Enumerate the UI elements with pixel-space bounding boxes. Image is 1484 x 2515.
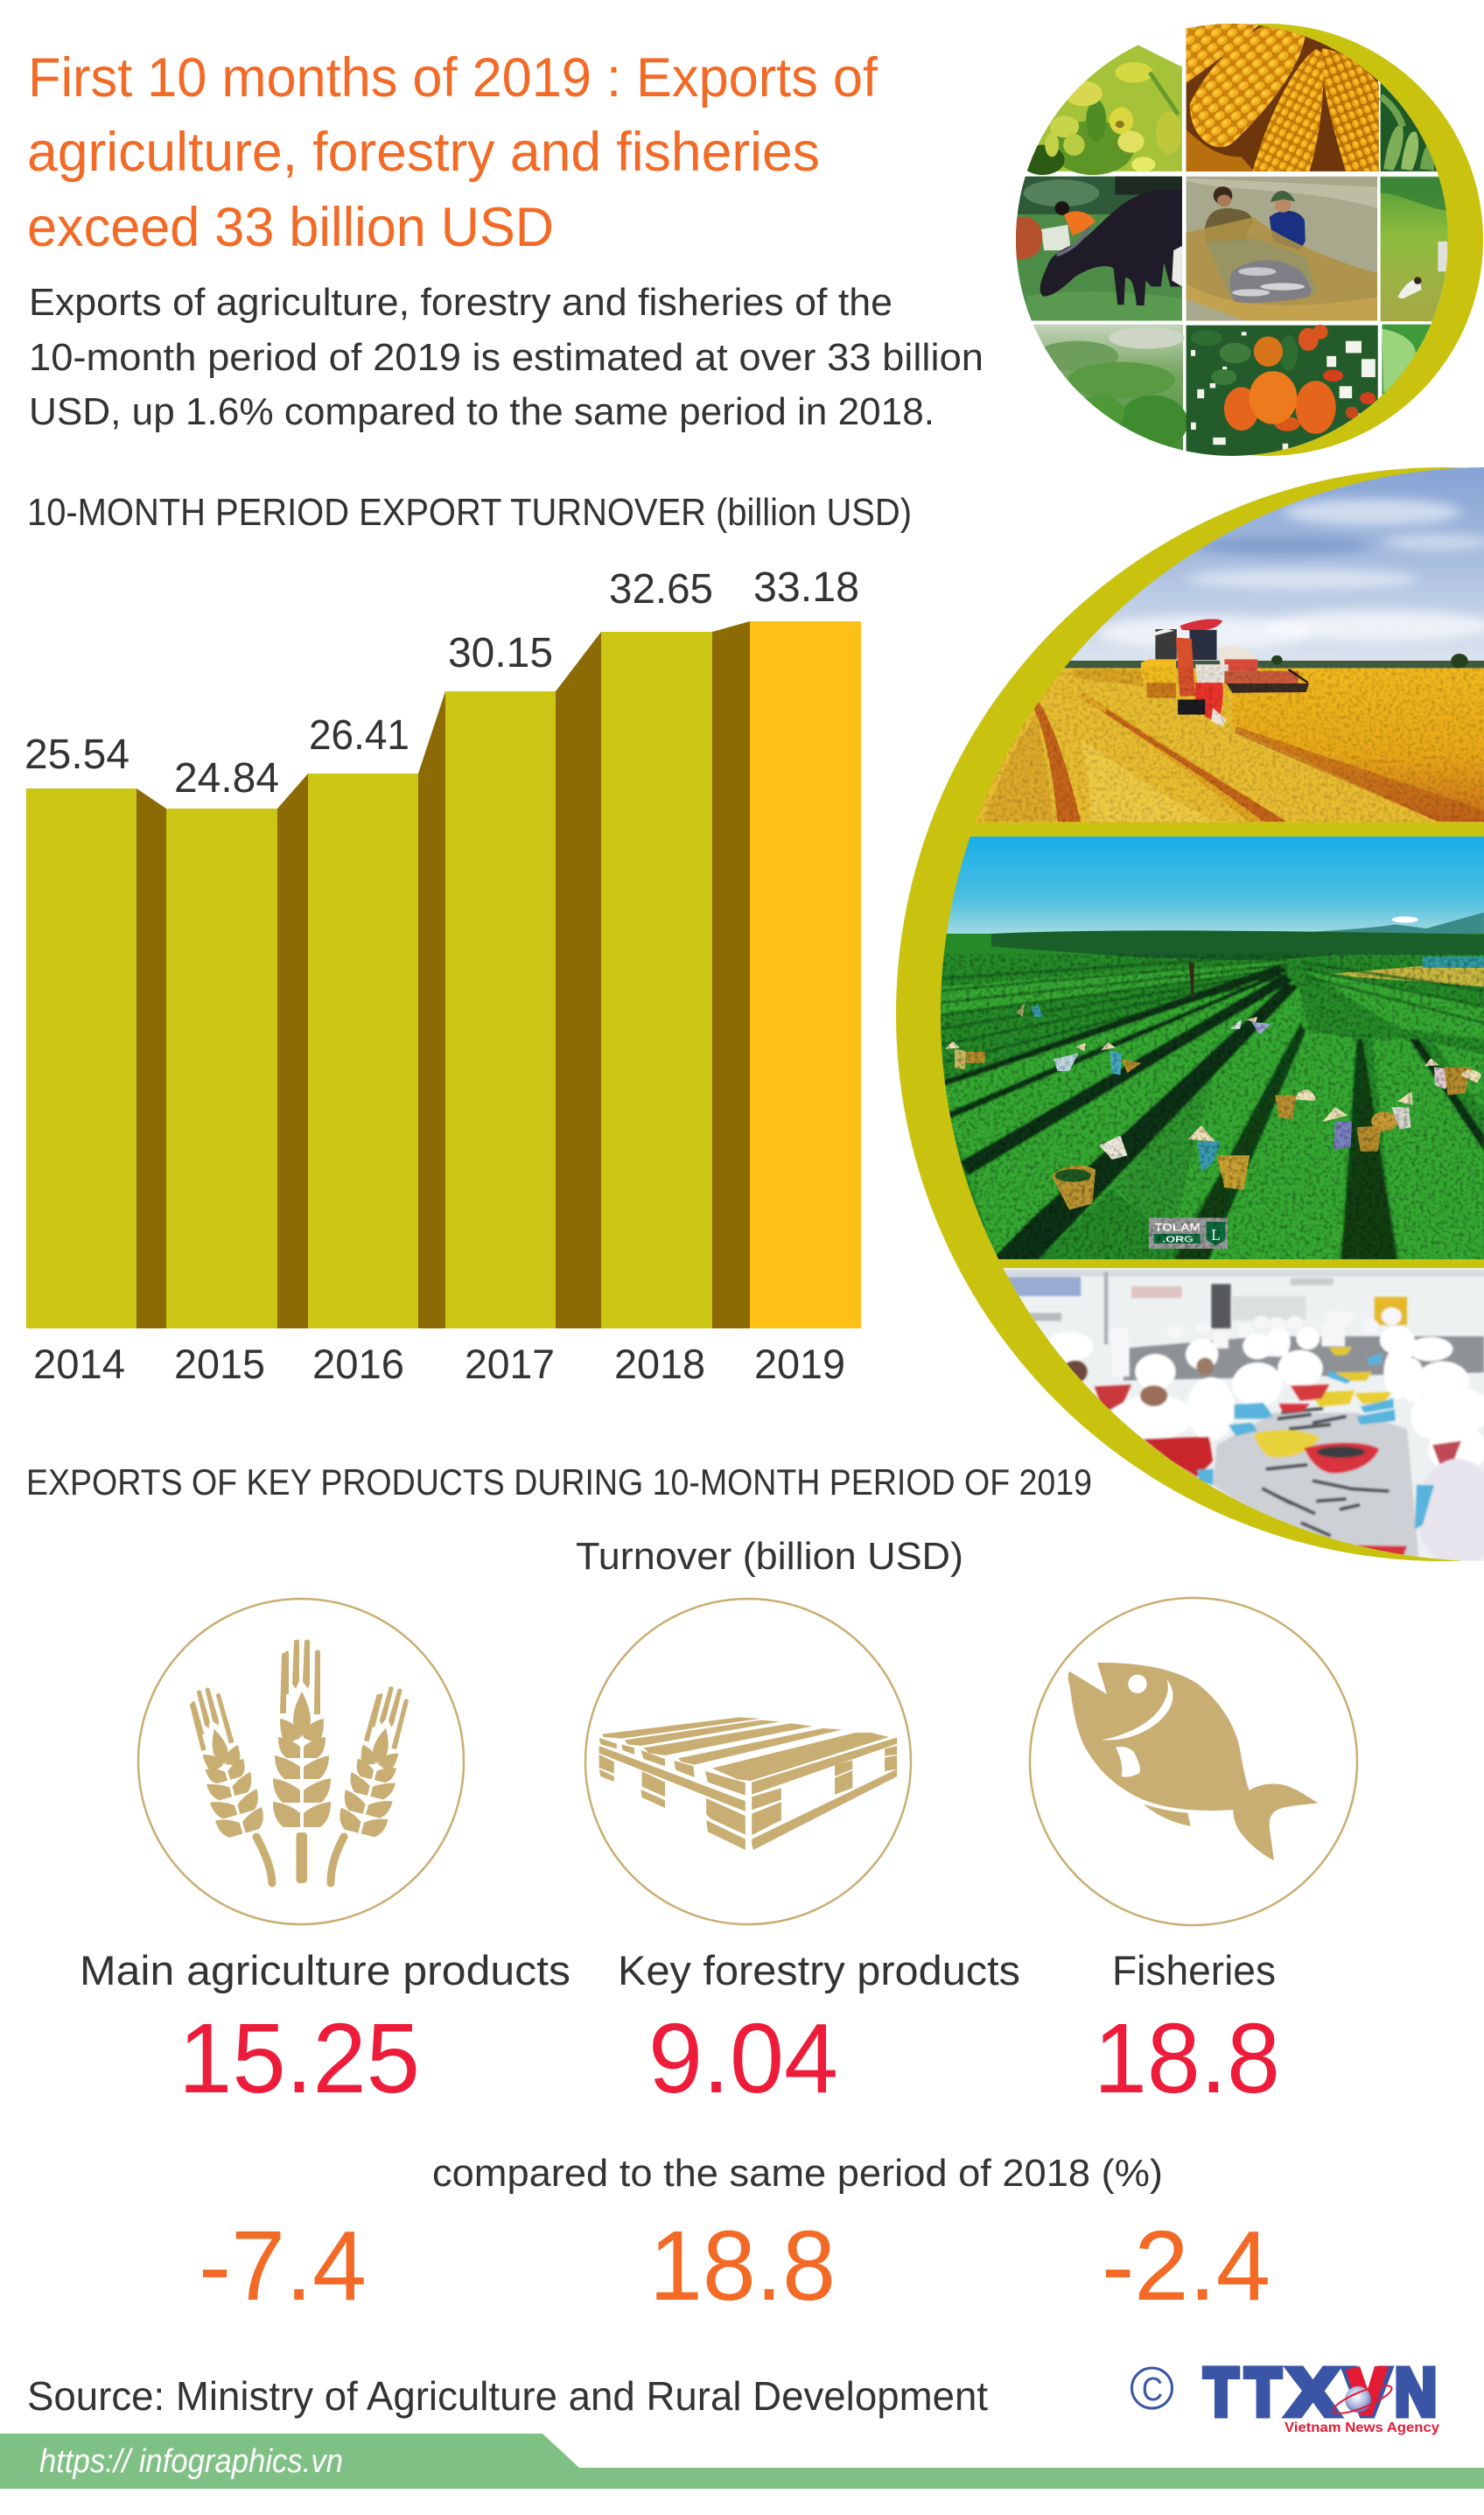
- year labels: 2015: [174, 1341, 265, 1387]
- badge: tolam.org: L: [1211, 1227, 1221, 1243]
- product label: main agriculture products: Main agriculture products: [80, 1947, 570, 1993]
- title: First 10 months of 2019 : Exports of: [28, 47, 878, 109]
- title: exceed 33 billion USD: [27, 197, 554, 258]
- bar values: 24.84: [174, 755, 279, 802]
- bar 2018: [601, 632, 712, 1328]
- cell: green vegetables: [1379, 82, 1437, 172]
- workers: [1045, 1327, 1484, 1473]
- logo: TTXVN Vietnam News Agency: T: [1245, 2355, 1281, 2430]
- cell: oranges on the tree: [1186, 325, 1378, 458]
- logo: TTXVN Vietnam News Agency: T: [1204, 2355, 1238, 2430]
- turnover values: 18.8: [1094, 2003, 1280, 2113]
- turnover subheading: Turnover (billion USD): [576, 1535, 963, 1578]
- cell: buffalo grazing: [1014, 177, 1182, 321]
- turnover values: 9.04: [648, 2003, 838, 2113]
- olive crescent behind collage: [1051, 24, 1483, 456]
- bar 2017: [445, 691, 556, 1328]
- year labels: 2018: [614, 1341, 705, 1387]
- photo: tea plantation: [941, 837, 1484, 1259]
- badge: tolam.org: .ORG: [1162, 1235, 1194, 1245]
- collage photo disc: [1016, 24, 1448, 456]
- turnover values: [178, 2003, 1280, 2113]
- bar values: 33.18: [753, 564, 859, 611]
- copyright mark: C: [1142, 2371, 1163, 2408]
- tree in field: [1189, 963, 1194, 999]
- cell: fishermen with net: [1186, 177, 1377, 321]
- turnover values: 15.25: [178, 2003, 420, 2113]
- percentage change values: [199, 2210, 1270, 2321]
- year labels: 2014: [33, 1341, 125, 1387]
- year labels: 2019: [754, 1341, 845, 1387]
- logo: TTXVN Vietnam News Agency: N: [1395, 2355, 1437, 2430]
- cell: rice grains: [1027, 30, 1182, 175]
- logo: TTXVN Vietnam News Agency: [1204, 2355, 1439, 2435]
- bar values: [24, 564, 859, 802]
- icon: fish: [1030, 1598, 1357, 1925]
- bar values: 26.41: [309, 712, 410, 759]
- intro text: 10-month period of 2019 is estimated at over 33 billion: [29, 336, 984, 379]
- product label: fisheries: Fisheries: [1112, 1947, 1276, 1993]
- bar values: 32.65: [609, 566, 713, 613]
- title: agriculture, forestry and fisheries: [27, 122, 820, 183]
- icon: wheat: [138, 1599, 464, 1924]
- website url: https:// infographics.vn: [39, 2443, 343, 2480]
- olive ring: [896, 467, 1484, 1561]
- bar values: 30.15: [448, 630, 553, 676]
- year labels: 2017: [465, 1341, 555, 1387]
- intro text: [29, 281, 984, 433]
- year labels: 2016: [312, 1341, 404, 1387]
- percentage change values: 18.8: [649, 2210, 836, 2321]
- gloves: [1197, 1353, 1434, 1529]
- far workers: [1110, 1307, 1402, 1377]
- bar values: 25.54: [24, 732, 130, 778]
- badge: tolam.org: TOLAM: [1155, 1222, 1200, 1233]
- intro text: USD, up 1.6% compared to the same period in 2018.: [29, 390, 934, 433]
- percentage change values: -2.4: [1102, 2210, 1270, 2321]
- tea pickers: [945, 1003, 1481, 1209]
- tea rows: [941, 955, 1484, 1260]
- large circular photo panel with olive ring: [875, 438, 1484, 1583]
- cell: leaf: [1382, 324, 1432, 396]
- percentage change values: -7.4: [199, 2210, 367, 2321]
- bar 2014: [26, 788, 136, 1328]
- cell: rice terraces: [1381, 177, 1448, 322]
- title: [27, 47, 878, 258]
- chart heading: 10-MONTH PERIOD EXPORT TURNOVER (billion USD): [27, 491, 912, 534]
- connecting side faces: [136, 621, 750, 1328]
- bar chart: export turnover 2014-2019: [24, 564, 861, 1387]
- comparison caption: compared to the same period of 2018 (%): [432, 2152, 1163, 2195]
- product label: key forestry products: Key forestry products: [618, 1947, 1020, 1993]
- cell: forest: [1032, 324, 1186, 450]
- harvester: [1141, 619, 1309, 726]
- processing table: [1213, 1412, 1418, 1558]
- badge: tolam.org: [1149, 1218, 1228, 1249]
- icon: wooden pallet: [585, 1599, 911, 1924]
- photo strips: [941, 467, 1484, 1561]
- bar 2019: [750, 621, 861, 1328]
- photo: fish processing factory: [1003, 1268, 1484, 1561]
- photo: rice harvester in golden field: [875, 438, 1484, 825]
- bar 2016: [308, 774, 418, 1328]
- cell: corn cobs: [1186, 18, 1379, 172]
- logo: TTXVN Vietnam News Agency: V: [1344, 2355, 1390, 2430]
- footer band: [0, 2434, 1484, 2489]
- source line: Source: Ministry of Agriculture and Rural Development: [27, 2373, 988, 2419]
- year labels: [33, 1341, 845, 1387]
- copyright mark: [1132, 2368, 1172, 2408]
- key products heading: EXPORTS OF KEY PRODUCTS DURING 10-MONTH PERIOD OF 2019: [26, 1461, 1092, 1503]
- logo: TTXVN Vietnam News Agency: Vietnam News Agency: [1284, 2420, 1439, 2435]
- baskets: [1254, 1430, 1320, 1457]
- bar 2015: [166, 809, 277, 1328]
- logo: TTXVN Vietnam News Agency: X: [1287, 2355, 1339, 2430]
- photo collage circle: farming and fishing scenes: [1006, 15, 1483, 464]
- intro text: Exports of agriculture, forestry and fisheries of the: [29, 281, 892, 324]
